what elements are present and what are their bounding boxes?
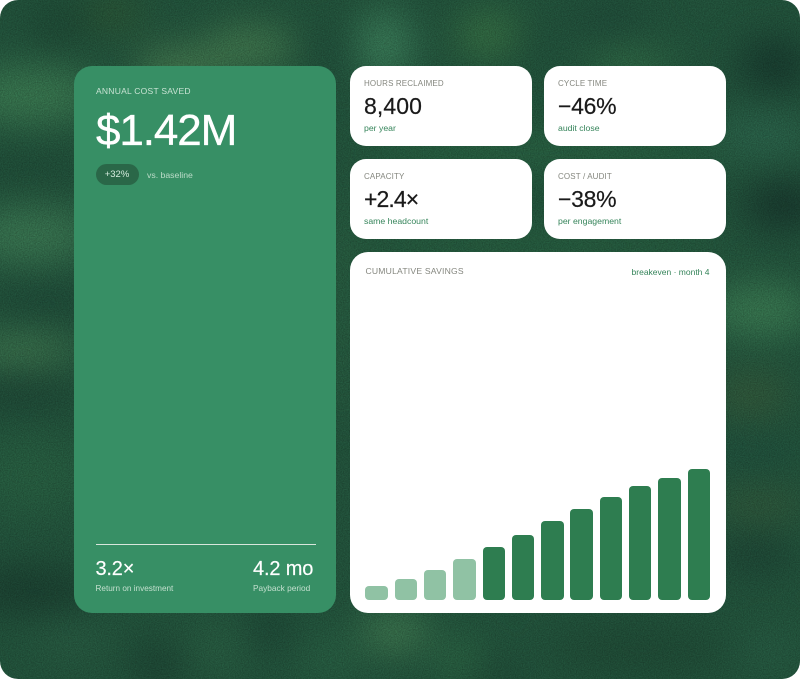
divider	[96, 544, 316, 545]
left band	[0, 67, 100, 123]
big number: $1.42M	[96, 106, 236, 155]
bar chart	[365, 469, 710, 600]
chart heading: CUMULATIVE SAVINGS	[366, 266, 464, 276]
note: per engagement	[558, 216, 621, 226]
panel: cycle time	[544, 66, 726, 146]
badge caption: vs. baseline	[147, 170, 193, 180]
value: 8,400	[364, 93, 422, 119]
top band	[30, 3, 90, 47]
badge: +32%	[96, 164, 138, 185]
label: COST / AUDIT	[558, 172, 612, 180]
stat: payback period	[253, 558, 313, 592]
bottom band	[30, 625, 110, 655]
label: CAPACITY	[364, 172, 404, 180]
panel: cumulative savings	[350, 252, 726, 613]
breakeven note: breakeven · month 4	[632, 266, 710, 276]
value: 3.2×	[96, 558, 134, 580]
panel: annual cost saved	[74, 66, 336, 613]
label: CYCLE TIME	[558, 78, 607, 88]
note: audit close	[558, 123, 600, 133]
value: −38%	[558, 186, 616, 212]
panel: capacity	[350, 159, 532, 239]
badge: +32%: +32%	[105, 169, 129, 180]
heading: annual cost saved: ANNUAL COST SAVED	[96, 86, 191, 96]
caption: Payback period	[253, 582, 310, 592]
value: −46%	[558, 93, 616, 119]
panel: hours reclaimed	[350, 66, 532, 146]
stat: return on investment	[96, 558, 174, 592]
centre gutters	[350, 143, 730, 157]
note: per year	[364, 123, 396, 133]
value: +2.4×	[364, 186, 418, 212]
caption: Return on investment	[96, 584, 173, 592]
label: HOURS RECLAIMED	[364, 78, 444, 88]
note: same headcount	[364, 216, 428, 226]
right band	[715, 113, 800, 157]
value: 4.2 mo	[253, 558, 313, 580]
panel: cost per audit	[544, 159, 726, 239]
